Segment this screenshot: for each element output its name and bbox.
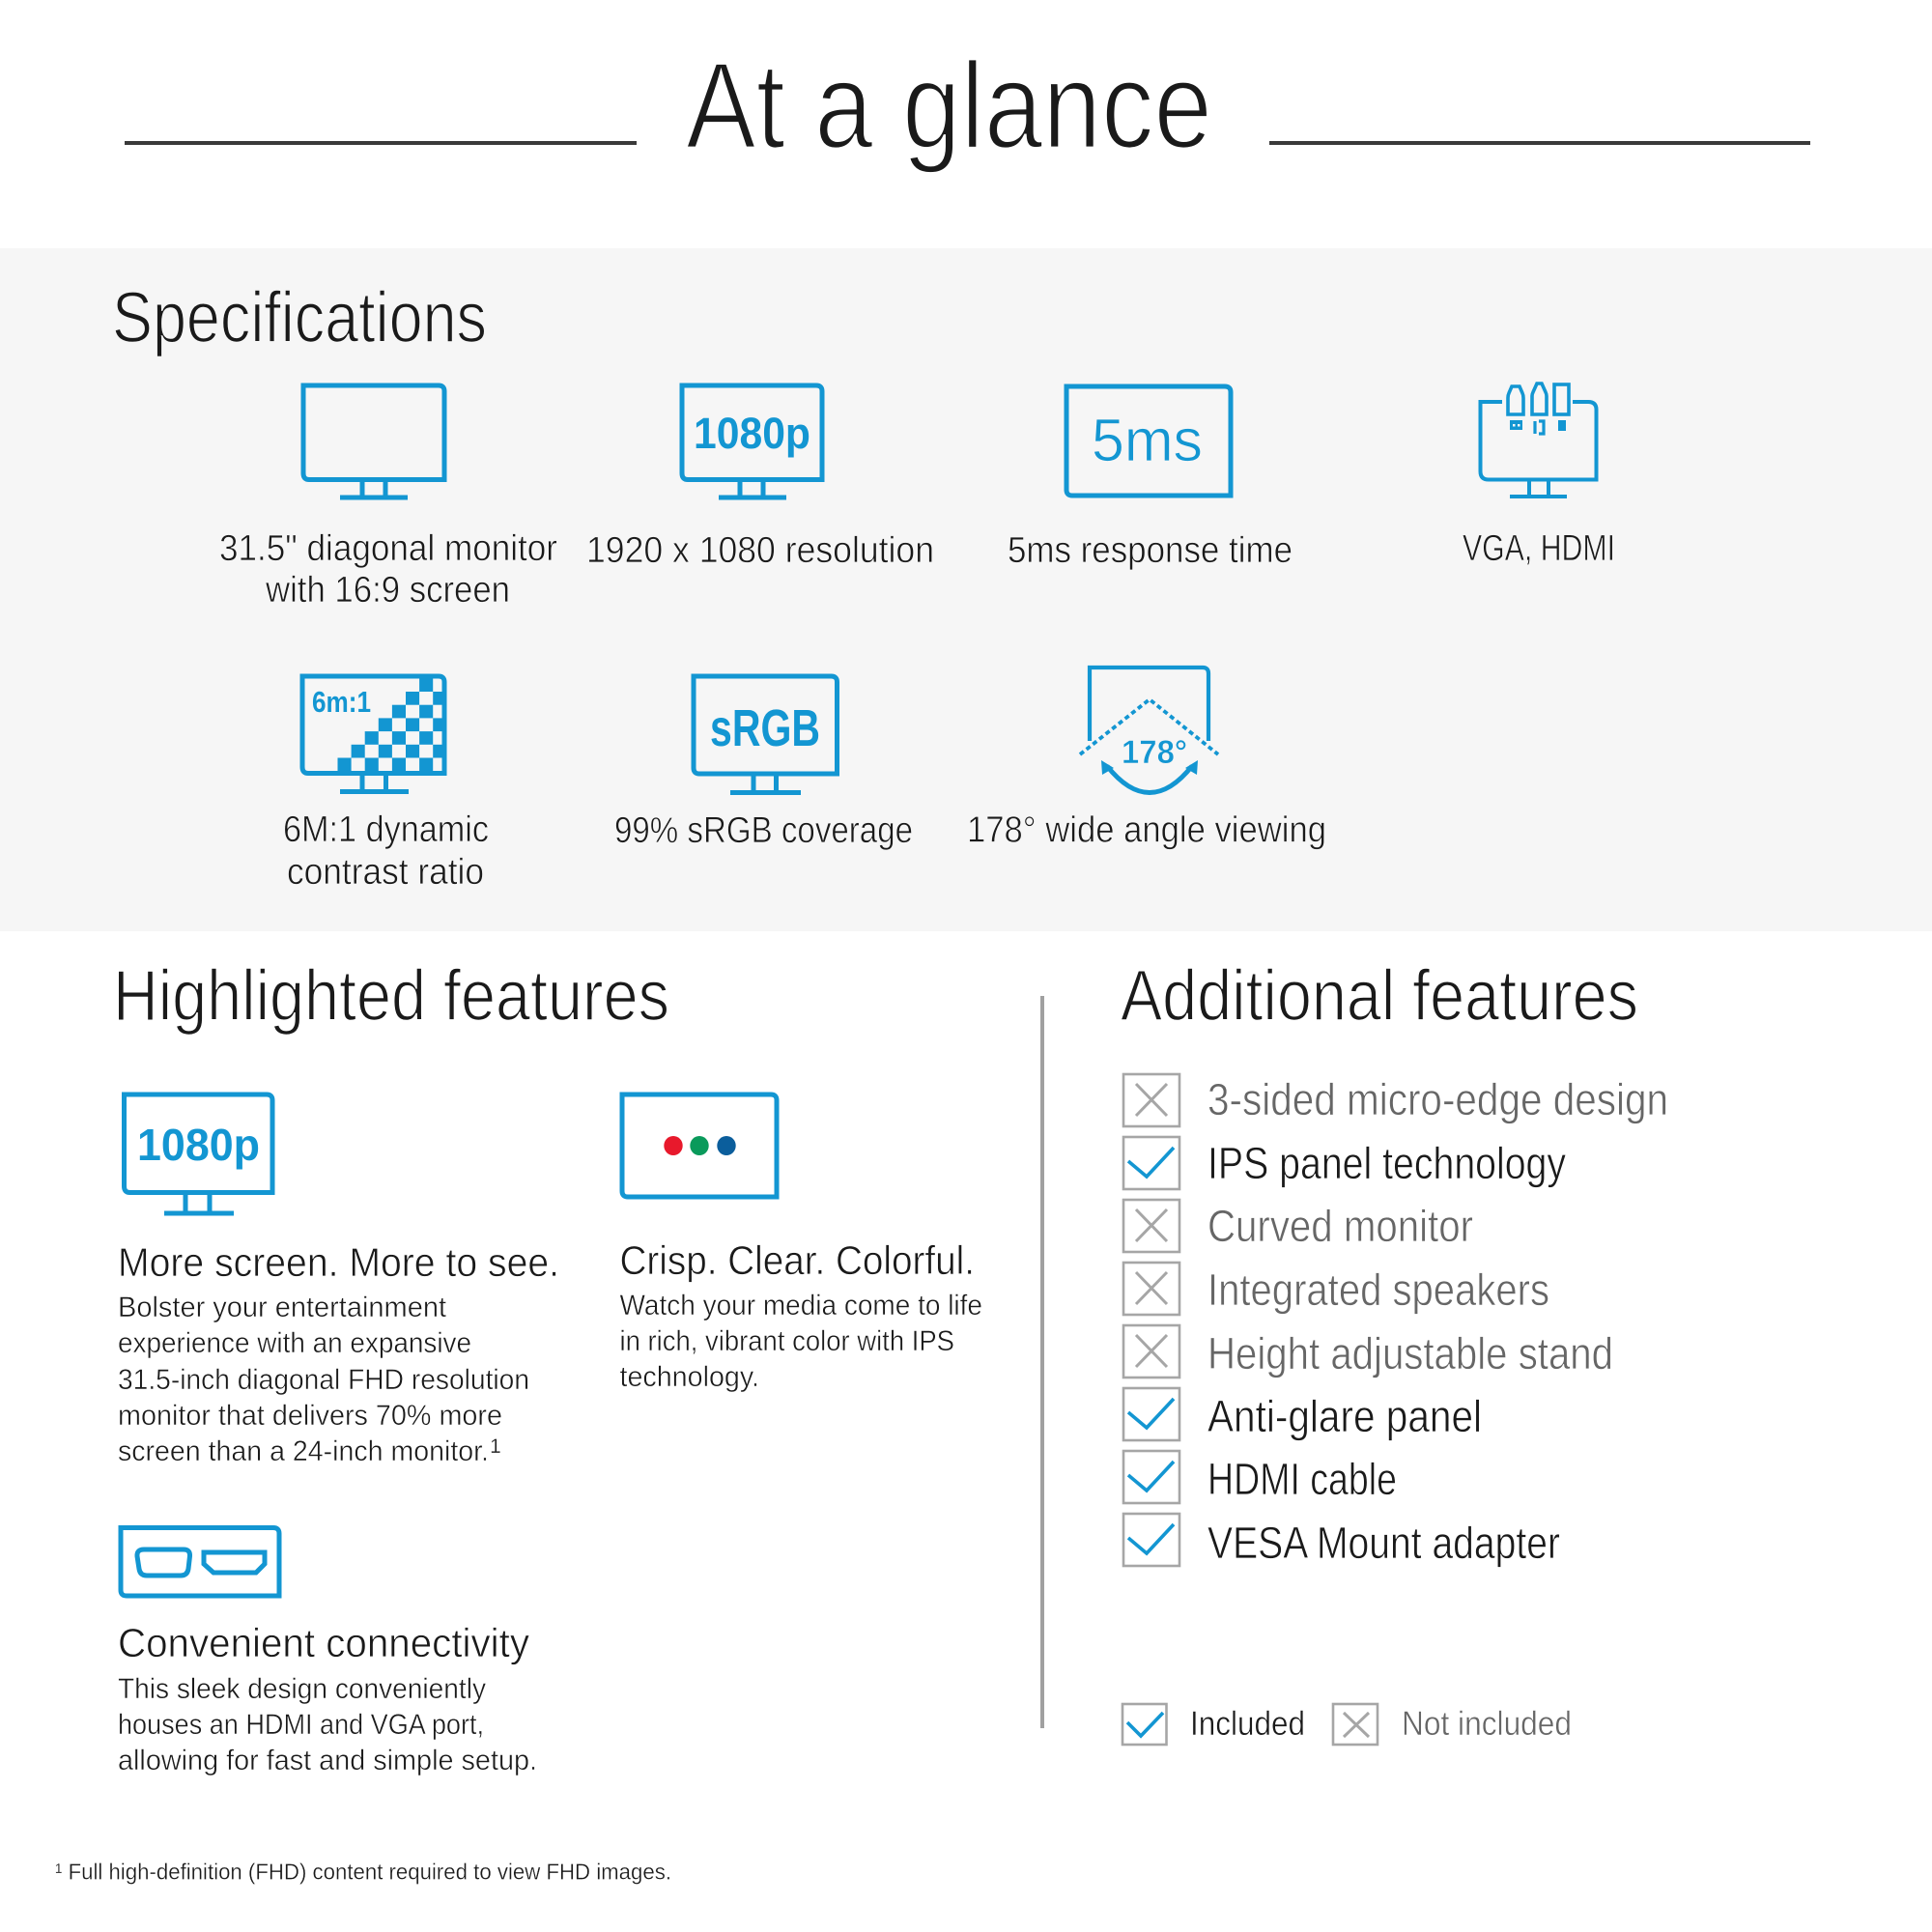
item: curved monitor [1123,1200,1473,1252]
feature: crisp clear colorful: in rich, vibrant color with IPS [620,1325,954,1357]
item: height adjustable stand: Height adjustable stand [1208,1328,1613,1378]
feature: crisp clear colorful: Crisp. Clear. Colorful. [620,1237,975,1283]
feature: more screen: monitor that delivers 70% more [118,1400,502,1432]
spec: viewing angle [967,668,1326,850]
feature: more screen: 1 [490,1435,501,1458]
checklist: additional features [1123,1074,1668,1568]
item: HDMI cable [1123,1451,1397,1504]
heading: additional features: Additional features [1121,955,1638,1036]
spec: contrast ratio [283,676,489,893]
item: integrated speakers [1123,1263,1549,1315]
feature: more screen: 1080p [137,1120,260,1170]
feature: convenient connectivity: This sleek design conveniently [118,1673,486,1705]
heading: specifications: Specifications [112,277,487,357]
legend: Not included [1402,1705,1572,1743]
spec: resolution [586,385,934,571]
panel: specifications [0,248,1932,931]
legend: Included [1190,1705,1305,1743]
feature: more screen: experience with an expansive [118,1327,471,1359]
feature: convenient connectivity: allowing for fast and simple setup. [118,1745,537,1776]
item: anti-glare panel: Anti-glare panel [1208,1391,1482,1441]
feature: more screen: 31.5-inch diagonal FHD resolution [118,1364,529,1396]
feature: more screen [118,1094,559,1467]
item: IPS panel technology [1123,1137,1566,1189]
spec: ports [1463,384,1615,569]
spec: response time [1008,386,1293,571]
spec: contrast ratio: contrast ratio [287,852,484,893]
feature: convenient connectivity: Convenient connectivity [118,1620,529,1665]
item: curved monitor: Curved monitor [1208,1201,1473,1251]
spec: viewing angle: 178° [1122,734,1187,771]
item: anti-glare panel [1123,1388,1482,1441]
spec: diagonal monitor [219,385,557,611]
feature: convenient connectivity [118,1528,537,1776]
footnote: ¹ Full high-definition (FHD) content required to view FHD images. [55,1859,671,1884]
spec: diagonal monitor: with 16:9 screen [265,570,510,611]
spec: contrast ratio: 6M:1 dynamic [283,810,489,850]
item: integrated speakers: Integrated speakers [1208,1264,1549,1315]
legend [1122,1704,1572,1745]
spec: response time: 5ms response time [1008,530,1293,571]
item: VESA mount adapter: VESA Mount adapter [1208,1518,1560,1568]
spec: color gamut [614,676,913,851]
feature: crisp clear colorful [620,1094,982,1393]
spec: diagonal monitor: 31.5" diagonal monitor [219,528,557,569]
title: At a glance [686,37,1212,174]
feature: crisp clear colorful: technology. [620,1361,759,1393]
spec: color gamut: 99% sRGB coverage [614,810,913,851]
item: VESA mount adapter [1123,1514,1560,1568]
feature: crisp clear colorful: Watch your media come to life [620,1290,982,1321]
item: 3-sided micro-edge design: 3-sided micro-edge design [1208,1074,1668,1124]
heading: highlighted features: Highlighted features [113,955,669,1036]
feature: more screen: screen than a 24-inch monitor. [118,1435,489,1467]
spec: response time: 5ms [1092,408,1203,474]
spec: resolution: 1920 x 1080 resolution [586,530,934,571]
feature: more screen: More screen. More to see. [118,1239,559,1285]
feature: more screen: Bolster your entertainment [118,1292,447,1323]
item: HDMI cable: HDMI cable [1208,1454,1397,1504]
spec: contrast ratio: 6m:1 [312,685,371,719]
spec: resolution: 1080p [694,409,810,458]
spec: color gamut: sRGB [710,699,820,757]
spec: ports: VGA, HDMI [1463,528,1615,569]
spec: viewing angle: 178° wide angle viewing [967,810,1326,850]
item: IPS panel technology: IPS panel technology [1208,1138,1566,1188]
feature: convenient connectivity: houses an HDMI and VGA port, [118,1709,484,1741]
title [125,37,1810,174]
